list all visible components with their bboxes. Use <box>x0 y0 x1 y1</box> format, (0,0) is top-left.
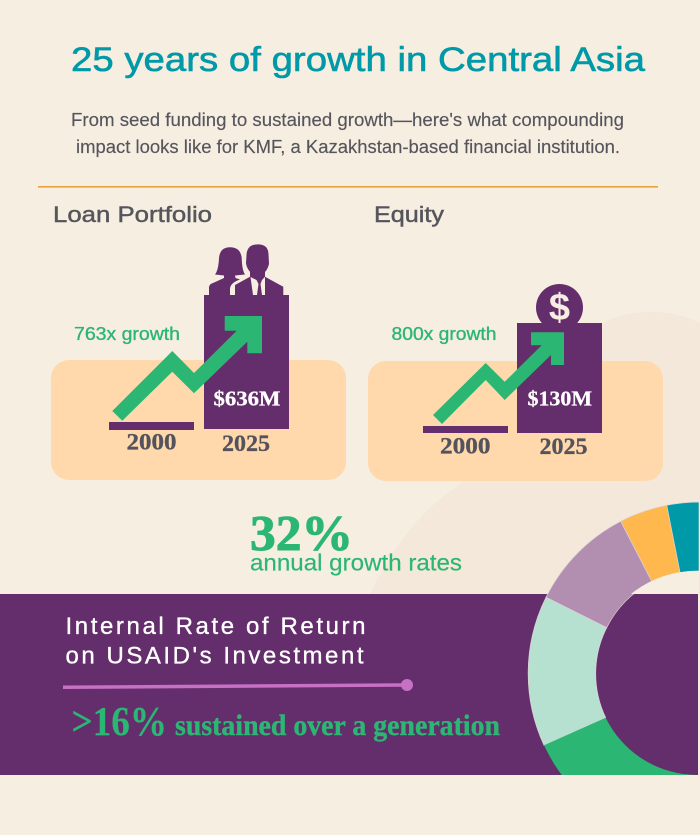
stat: 32% annual growth: annual growth rates <box>250 550 462 576</box>
segment: mauve <box>546 521 652 628</box>
donut hole above banner <box>631 571 699 594</box>
banner heading <box>66 613 366 670</box>
stat: 32% annual growth: 32% <box>250 504 353 560</box>
stat: over 16%: sustained over a generation <box>175 709 500 742</box>
bar: 2025 <box>204 295 289 429</box>
segment: teal <box>667 502 699 573</box>
icon: business people <box>209 244 283 295</box>
panel: loan portfolio <box>51 202 346 480</box>
subtitle <box>71 110 624 157</box>
value: $636M: $636M <box>214 386 281 410</box>
divider line with dot <box>63 679 413 691</box>
peach background panel <box>368 361 663 481</box>
background blob <box>370 312 700 594</box>
bar: 2025 <box>517 323 602 433</box>
donut chart <box>528 502 699 775</box>
title: 25 years of growth in Central Asia <box>71 41 645 79</box>
heading: equity: Equity <box>374 202 444 227</box>
stat: over 16% <box>72 698 500 744</box>
icon: dollar coin: $ <box>549 287 570 329</box>
segment: yellow <box>621 505 680 582</box>
banner heading: Internal Rate of Return <box>66 613 366 640</box>
segment: green <box>544 718 696 775</box>
label: 2000: 2000 <box>126 430 176 454</box>
label: 2000: 2000 <box>440 434 490 458</box>
label: 763x growth: 763x growth <box>74 324 180 344</box>
heading: loan portfolio: Loan Portfolio <box>53 202 212 227</box>
value: $130M: $130M <box>528 386 592 410</box>
icon: dollar coin <box>536 284 583 331</box>
bar: 2000 <box>109 422 194 430</box>
subtitle: impact looks like for KMF, a Kazakhstan-based financial institution. <box>76 137 620 157</box>
peach background panel <box>51 360 346 480</box>
panel: equity <box>368 202 663 481</box>
arrow: growth <box>112 316 262 421</box>
label: 800x growth: 800x growth <box>392 324 496 344</box>
label: 2025: 2025 <box>222 431 270 456</box>
subtitle: From seed funding to sustained growth—here's what compounding <box>71 110 624 130</box>
banner heading: on USAID's Investment <box>66 642 364 670</box>
purple banner <box>0 594 698 775</box>
stat: 32% annual growth <box>250 504 462 576</box>
bar: 2000 <box>423 426 508 433</box>
arrow: growth <box>433 332 564 424</box>
segment: light green <box>528 597 607 745</box>
label: 2025: 2025 <box>540 434 588 459</box>
stat: over 16%: >16% <box>72 698 167 744</box>
